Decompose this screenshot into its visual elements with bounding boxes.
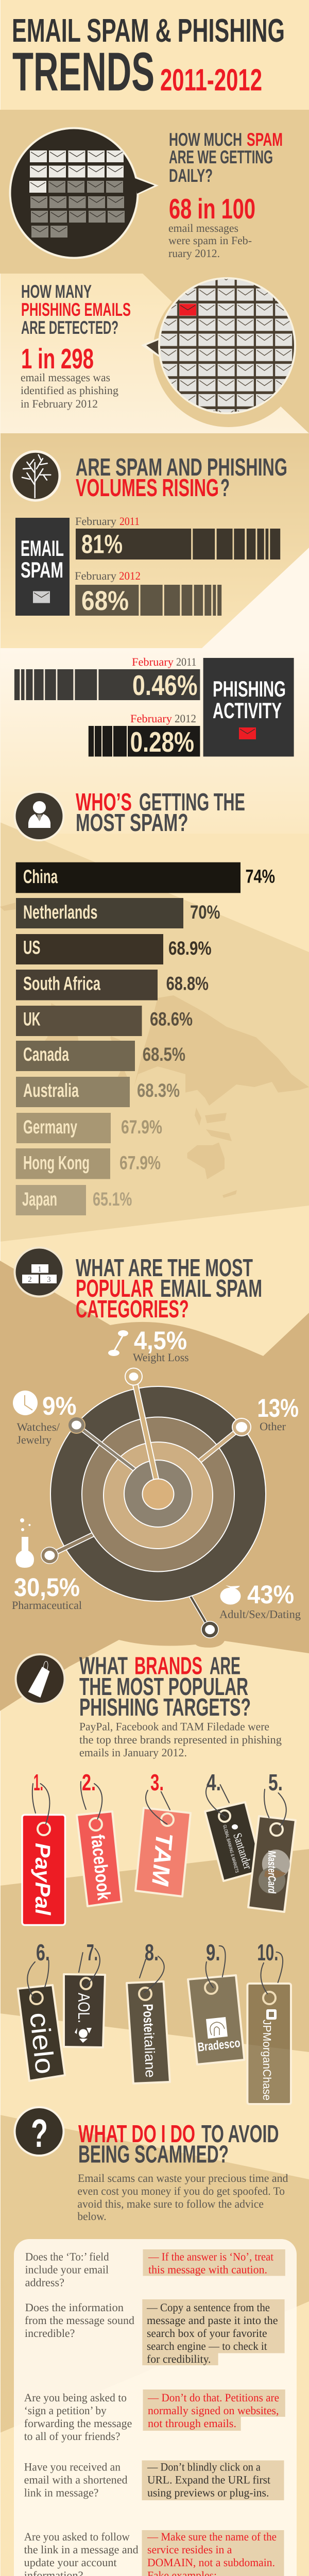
label: pharmaceutical [12, 1518, 82, 1612]
advice row 5: — Make sure the name of the [147, 2530, 277, 2543]
tag 6: Cielo: 6. [36, 1939, 50, 1965]
label: watches / jewelry: 9% [42, 1392, 76, 1420]
heading: phishing emails [21, 281, 131, 338]
text block: phishing description [21, 371, 118, 410]
advice row 3: not through emails. [148, 2417, 236, 2430]
text block: brands intro: the top three brands represented in phishing [79, 1733, 282, 1746]
email spam box [15, 518, 70, 616]
heading: popular email spam categories: POPULAR [76, 1275, 153, 1302]
tag 3: TAM: 3. [150, 1769, 164, 1795]
bar: Hong Kong: 67.9% [119, 1153, 161, 1174]
text block: avoid intro: below. [77, 2210, 107, 2223]
stat: 1 in 298: 1 in 298 [21, 343, 94, 375]
bar: spam February 2011: 81% [81, 530, 123, 558]
bar: spam February 2011: February [75, 515, 116, 528]
heading: how much spam: DAILY? [169, 165, 213, 186]
bar: China: China [23, 866, 58, 887]
icon: speech bubble with phishing envelope [141, 277, 304, 427]
bar: Canada: 68.5% [143, 1044, 185, 1065]
label: adult: 43% [247, 1580, 294, 1609]
advice row 1: — If the answer is ‘No’, treat [148, 2250, 273, 2263]
panel: popular spam categories [0, 1248, 309, 1711]
tag 8: Poste Italiane: italiane [141, 2032, 158, 2078]
bar: China: 74% [245, 866, 275, 887]
bar: US: 68.9% [168, 938, 212, 959]
panel: how much spam [10, 128, 283, 260]
tag 4: Santander: GLOBAL BANKING & MARKETS [222, 1824, 240, 1873]
heading: are spam and phishing volumes rising: VOLUMES RISING [76, 474, 219, 502]
advice row 5: update your account [24, 2556, 117, 2569]
text block: avoid intro [77, 2172, 288, 2223]
bar: Germany: 67.9% [121, 1116, 162, 1138]
text block: avoid intro: avoid this, make sure to follow the advice [77, 2197, 264, 2210]
heading: how much spam: HOW MUCH [169, 129, 242, 150]
advice row 1: this message with caution. [148, 2263, 267, 2276]
bar: phishing February 2012 [89, 712, 200, 758]
tag 3: TAM: TAM [147, 1832, 178, 1888]
email spam box: SPAM [21, 558, 63, 583]
label: adult [219, 1580, 301, 1621]
label: weight loss: Weight Loss [133, 1351, 189, 1364]
bar: spam February 2012: February [75, 569, 116, 582]
world map backdrop [0, 903, 309, 1198]
title [12, 12, 285, 102]
advice row 1: Does the ‘To:’ field [25, 2250, 109, 2263]
bar: South Africa [16, 970, 209, 1001]
text block: spam description: were spam in Feb- [168, 234, 252, 247]
title: TRENDS [12, 41, 154, 102]
label: pharmaceutical: Pharmaceutical [12, 1599, 82, 1612]
icon: podium: 1 [38, 1265, 42, 1274]
bar: UK: UK [23, 1009, 41, 1029]
heading: popular email spam categories: CATEGORIES? [76, 1296, 189, 1323]
advice row 2: search engine — to check it [147, 2340, 267, 2352]
bar: phishing February 2011: February [132, 655, 174, 668]
text block: spam description: email messages [168, 222, 238, 234]
email spam box: EMAIL [21, 536, 64, 561]
advice row 4: link in message? [24, 2486, 98, 2499]
advice row 3 [24, 2389, 285, 2443]
tag 10: JPMorgan Chase [247, 1939, 291, 2104]
advice row 3: ‘sign a petition’ by [24, 2404, 107, 2417]
advice row 2: incredible? [25, 2327, 75, 2340]
advice row 3: Are you being asked to [24, 2391, 127, 2404]
icon: podium [14, 1248, 64, 1296]
panel: phishing activity [14, 655, 294, 758]
advice row 2: — Copy a sentence from the [146, 2301, 270, 2314]
tag 7: AOL [64, 1939, 105, 2047]
advice row 3: normally signed on websites, [148, 2404, 279, 2417]
advice row 2: from the message sound [25, 2314, 134, 2327]
advice row 1: include your email [25, 2263, 109, 2276]
icon: speech bubble of envelopes [10, 128, 159, 258]
bar: spam February 2012: 2012 [119, 569, 141, 582]
panel: who's getting the most spam [0, 789, 309, 1215]
bar: China [16, 862, 275, 893]
tag 9: Bradesco: Bradesco [197, 2036, 241, 2055]
icon: bare tree [11, 451, 60, 500]
heading: popular email spam categories: EMAIL SPAM [160, 1275, 262, 1302]
bar: Netherlands: Netherlands [23, 902, 97, 923]
label: weight loss: 4,5% [134, 1326, 187, 1355]
bar: Hong Kong: Hong Kong [23, 1153, 90, 1174]
advice row 2: message and paste it into the [147, 2314, 278, 2327]
pin: other [232, 1418, 251, 1436]
advice row 3: forwarding the message [24, 2417, 132, 2430]
heading: brands [79, 1653, 251, 1721]
tag 10: JPMorgan Chase: JPMorganChase [261, 2020, 273, 2100]
tag 8: Poste Italiane: Poste [140, 2004, 157, 2032]
tag 1: PayPal: PayPal [31, 1843, 55, 1916]
bar: spam February 2012: 68% [81, 586, 129, 616]
bar: Japan: 65.1% [93, 1189, 132, 1210]
bar: US: US [23, 937, 40, 958]
pin: pharmaceutical [41, 1547, 58, 1564]
text block: avoid intro: even cost you money if you do get spoofed. To [77, 2184, 285, 2197]
heading: avoid being scammed: BEING SCAMMED? [78, 2141, 229, 2168]
advice row 1: address? [25, 2276, 64, 2289]
title: 2011-2012 [160, 63, 262, 97]
heading: are spam and phishing volumes rising: ? [220, 474, 230, 502]
pin: adult [201, 1621, 218, 1638]
tag 8: Poste Italiane [127, 1939, 170, 2083]
bar: UK: 68.6% [150, 1009, 193, 1029]
bar: Japan: Japan [22, 1189, 57, 1210]
bar: Hong Kong [16, 1148, 161, 1179]
advice row 2: search box of your favorite [147, 2327, 267, 2340]
tag 5: MasterCard: MasterCard [266, 1851, 278, 1894]
tag 1: PayPal: 1. [33, 1769, 43, 1795]
bar: Japan [16, 1185, 132, 1215]
advice row 4: email with a shortened [24, 2473, 128, 2486]
bar: Germany: Germany [23, 1116, 77, 1138]
tag 4: Santander: 4. [207, 1769, 221, 1795]
label: pharmaceutical: 30,5% [14, 1573, 80, 1602]
bar: phishing February 2012: February [130, 712, 172, 725]
bar: Australia: 68.3% [137, 1080, 180, 1101]
heading: are spam and phishing volumes rising [76, 454, 287, 502]
tag 10: JPMorgan Chase: 10. [257, 1939, 278, 1965]
icon: person [14, 792, 64, 840]
tag 7: AOL: AOL. [75, 1993, 93, 2023]
advice row 2 [25, 2299, 285, 2365]
tag 1: PayPal [22, 1769, 65, 1925]
phishing activity box [203, 658, 294, 756]
bar: Australia [16, 1077, 180, 1107]
text block: spam description [168, 222, 252, 260]
advice row 4: — Don’t blindly click on a [147, 2461, 261, 2473]
text block: brands intro: PayPal, Facebook and TAM Filedade were [79, 1720, 269, 1733]
bar: phishing February 2011: 0.46% [132, 669, 198, 701]
bar: spam February 2011: 2011 [119, 515, 140, 528]
bar: phishing February 2012: 0.28% [130, 726, 194, 758]
label: adult: Adult/Sex/Dating [219, 1607, 301, 1621]
heading: popular email spam categories [76, 1255, 262, 1323]
advice row 4: URL. Expand the URL first [147, 2473, 270, 2486]
heading: brands: BRANDS [134, 1653, 202, 1680]
text block: spam description: ruary 2012. [168, 247, 220, 260]
advice panel [14, 2239, 297, 2576]
icon: podium: 3 [47, 1276, 51, 1284]
bar chart: countries [16, 862, 275, 1215]
icon: question mark: ? [31, 2111, 48, 2156]
panel: are spam and phishing volumes rising [11, 451, 287, 616]
advice row 1 [25, 2249, 285, 2289]
label: watches / jewelry [13, 1391, 76, 1446]
tag 3: TAM [135, 1769, 191, 1896]
icon: question mark [14, 2107, 64, 2156]
heading: how much spam: SPAM [247, 129, 283, 150]
pin: watches [68, 1417, 85, 1433]
text block: avoid intro: Email scams can waste your precious time and [78, 2172, 288, 2184]
advice row 5: Are you asked to follow [24, 2530, 130, 2543]
heading: who's getting the most spam: GETTING THE [139, 789, 245, 816]
heading: brands: ARE [210, 1653, 241, 1680]
tag 9: Bradesco: 9. [206, 1939, 220, 1965]
label: watches / jewelry: Watches/ [16, 1420, 60, 1433]
text block: phishing description: email messages was [21, 371, 110, 384]
bar: South Africa: 68.8% [166, 973, 209, 994]
tag 6: Cielo: cielo [24, 2011, 60, 2076]
advice row 4: using previews or plug-ins. [147, 2486, 269, 2499]
tag 4: Santander [205, 1769, 263, 1881]
bar: Germany [16, 1113, 162, 1143]
bar: phishing February 2011: 2011 [176, 655, 197, 668]
concentric ring chart [41, 1368, 266, 1638]
bar: phishing February 2011 [14, 655, 200, 701]
advice row 2: for credibility. [147, 2352, 211, 2365]
bar: Canada [16, 1041, 185, 1071]
pin: weight loss [125, 1368, 142, 1385]
tag 2: Facebook: 2. [82, 1769, 96, 1795]
bar: spam February 2012 [75, 569, 221, 616]
text block: phishing description: identified as phishing [21, 384, 118, 397]
advice row 5: DOMAIN, not a subdomain. [147, 2556, 275, 2569]
label: other: Other [260, 1420, 286, 1433]
heading: who's getting the most spam: MOST SPAM? [76, 809, 188, 837]
stat: 68 in 100: 68 in 100 [169, 193, 255, 225]
text block: brands intro: emails in January 2012. [79, 1746, 187, 1759]
tag 6: Cielo [18, 1939, 65, 2081]
label: watches / jewelry: Jewelry [16, 1433, 52, 1446]
heading: phishing emails: ARE DETECTED? [21, 317, 118, 338]
heading: phishing emails: PHISHING EMAILS [21, 299, 131, 320]
advice row 3: to all of your friends? [24, 2430, 120, 2443]
label: other [257, 1394, 299, 1433]
advice row 3: — Don’t do that. Petitions are [147, 2391, 279, 2404]
heading: avoid being scammed [78, 2121, 279, 2168]
tag 2: Facebook [77, 1769, 122, 1906]
icon: price tag [15, 1654, 65, 1704]
panel: how many phishing emails [21, 277, 304, 427]
bar: Canada: Canada [23, 1044, 69, 1065]
bar: phishing February 2012: 2012 [175, 712, 196, 725]
tag 5: MasterCard: 5. [268, 1769, 283, 1795]
label: other: 13% [257, 1394, 299, 1422]
tag 8: Poste Italiane: 8. [145, 1939, 159, 1965]
heading: who's getting the most spam [76, 789, 245, 837]
tag 4: Santander: Santander [231, 1832, 254, 1871]
label: weight loss [108, 1326, 189, 1364]
panel: what do I do to avoid being scammed [14, 2107, 297, 2576]
bar: UK [16, 1006, 193, 1036]
advice row 5: service resides in a [147, 2543, 232, 2556]
advice row 5: the link in a message and [24, 2543, 139, 2556]
heading: how much spam [169, 129, 283, 186]
bar: South Africa: South Africa [23, 973, 100, 994]
tag 9: Bradesco [188, 1939, 244, 2064]
heading: who's getting the most spam: WHO’S [76, 789, 132, 816]
bar: Australia: Australia [23, 1080, 79, 1101]
tag 7: AOL: 7. [87, 1939, 98, 1965]
text block: phishing description: in February 2012 [21, 397, 98, 410]
heading: phishing emails: HOW MANY [21, 281, 92, 302]
bar: US [16, 934, 212, 964]
heading: brands: WHAT [79, 1653, 128, 1680]
tag 5: MasterCard [248, 1769, 296, 1912]
bar: spam February 2011 [75, 515, 280, 560]
text block: brands intro [79, 1720, 282, 1759]
tag 2: Facebook: facebook [87, 1834, 115, 1902]
advice row 5 [24, 2530, 284, 2576]
bar: Netherlands [16, 898, 220, 928]
advice row 4 [24, 2461, 284, 2500]
heading: avoid being scammed: WHAT DO I DO [78, 2121, 195, 2148]
panel: phishing target brands [15, 1653, 296, 2104]
advice row 4: Have you received an [24, 2461, 121, 2473]
bar: Netherlands: 70% [190, 902, 220, 923]
icon: podium: 2 [28, 1276, 32, 1284]
advice row 2: Does the information [25, 2301, 124, 2314]
